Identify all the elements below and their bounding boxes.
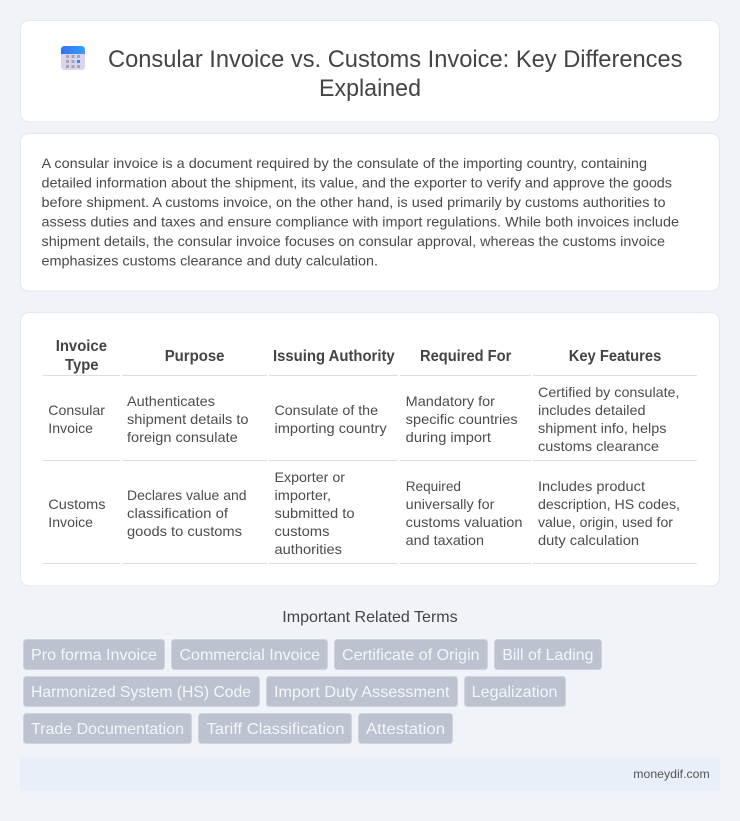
related term tags <box>24 640 602 744</box>
tag: certificate of origin: Certificate of Origin <box>342 647 480 664</box>
tag: import duty assessment: Import Duty Assessment <box>274 684 450 701</box>
tag: legalization <box>464 676 566 706</box>
table row: customs invoice: customs valuation <box>406 514 522 530</box>
table header row: Key Features <box>569 348 661 365</box>
tag: pro forma invoice <box>24 640 164 670</box>
tag: commercial invoice: Commercial Invoice <box>180 647 320 664</box>
table row: customs invoice <box>43 469 697 564</box>
table row: consular invoice: Invoice <box>48 420 93 436</box>
table header row: Type <box>65 357 99 374</box>
tag: certificate of origin <box>334 640 488 670</box>
tag: commercial invoice <box>172 640 328 670</box>
title: Explained <box>319 75 421 102</box>
table row: customs invoice: Declares value and <box>127 487 246 503</box>
table row: consular invoice: Consulate of the <box>274 402 378 418</box>
table row: customs invoice: value, origin, used for <box>538 514 673 530</box>
table row: consular invoice: foreign consulate <box>127 429 238 445</box>
table header row: Issuing Authority <box>273 348 395 365</box>
tag: trade documentation <box>24 714 192 744</box>
tag: bill of lading: Bill of Lading <box>502 647 594 664</box>
table header row: Purpose <box>165 348 225 365</box>
panel: comparison table <box>20 312 720 586</box>
table row: consular invoice: Mandatory for <box>406 393 495 409</box>
text block: description paragraph: emphasizes customs clearance and duty calculation. <box>42 252 378 268</box>
icon: calendar <box>61 46 85 70</box>
tag: harmonized system code: Harmonized System (HS) Code <box>31 684 251 701</box>
table row: customs invoice: Includes product <box>538 478 645 494</box>
table row: customs invoice: universally for <box>406 496 495 512</box>
panel: title header <box>20 20 720 122</box>
panel: description <box>20 134 720 291</box>
table row: customs invoice: and taxation <box>406 532 484 548</box>
table row: customs invoice: Required <box>406 478 461 494</box>
table row: customs invoice: authorities <box>274 541 342 557</box>
table row: customs invoice: Invoice <box>48 514 93 530</box>
text block: description paragraph: detailed information about the shipment, its value, and the exporter to verify and approve the goods <box>42 174 672 190</box>
table row: customs invoice: Exporter or <box>274 469 345 485</box>
table row: customs invoice: duty calculation <box>538 532 639 548</box>
table row: customs invoice: customs <box>274 523 330 539</box>
text block: description paragraph: shipment details, the consular invoice focuses on consular approval, whereas the customs invoice <box>42 233 665 249</box>
footer <box>20 757 720 791</box>
tag: bill of lading <box>494 640 602 670</box>
table row: customs invoice: goods to customs <box>127 523 242 539</box>
table row: consular invoice: during import <box>406 429 491 445</box>
tag: tariff classification <box>198 714 352 744</box>
table row: customs invoice: description, HS codes, <box>538 496 680 512</box>
tag: pro forma invoice: Pro forma Invoice <box>31 647 157 664</box>
table row: consular invoice <box>43 384 697 461</box>
table header row: Invoice <box>56 338 107 355</box>
tag: tariff classification: Tariff Classification <box>206 721 344 738</box>
table row: customs invoice: submitted to <box>274 505 355 521</box>
tag: harmonized system code <box>24 676 260 706</box>
table row: consular invoice: includes detailed <box>538 402 646 418</box>
tag: attestation <box>358 714 452 744</box>
text block: description paragraph: assess duties and taxes and ensure compliance with import regulations. While both invoices include <box>42 214 679 230</box>
tag: import duty assessment <box>266 676 458 706</box>
tag: attestation: Attestation <box>366 721 445 738</box>
table row: consular invoice: Consular <box>48 402 105 418</box>
table row: customs invoice: classification of <box>127 505 228 521</box>
table row: consular invoice: specific countries <box>406 411 518 427</box>
title: Consular Invoice vs. Customs Invoice: Key Differences <box>108 46 682 73</box>
table row: consular invoice: shipment details to <box>127 411 249 427</box>
table row: consular invoice: shipment info, helps <box>538 420 666 436</box>
table header row: Required For <box>420 348 511 365</box>
tag: legalization: Legalization <box>472 684 558 701</box>
table row: consular invoice: importing country <box>274 420 387 436</box>
heading: important related terms: Important Related Terms <box>282 609 458 626</box>
text block: description paragraph: before shipment. A customs invoice, on the other hand, is used primarily by customs authorities to <box>42 194 666 210</box>
footer: moneydif.com <box>633 767 710 781</box>
table row: consular invoice: Authenticates <box>127 393 215 409</box>
text block: description paragraph <box>42 155 679 268</box>
table row: consular invoice: Certified by consulate, <box>538 384 680 400</box>
table row: customs invoice: importer, <box>274 487 331 503</box>
text block: description paragraph: A consular invoice is a document required by the consulate of the importing country, containing <box>42 155 647 171</box>
table row: consular invoice: customs clearance <box>538 438 659 454</box>
table header row <box>43 338 697 376</box>
tag: trade documentation: Trade Documentation <box>31 721 184 738</box>
title <box>108 46 682 102</box>
table row: customs invoice: Customs <box>48 496 106 512</box>
